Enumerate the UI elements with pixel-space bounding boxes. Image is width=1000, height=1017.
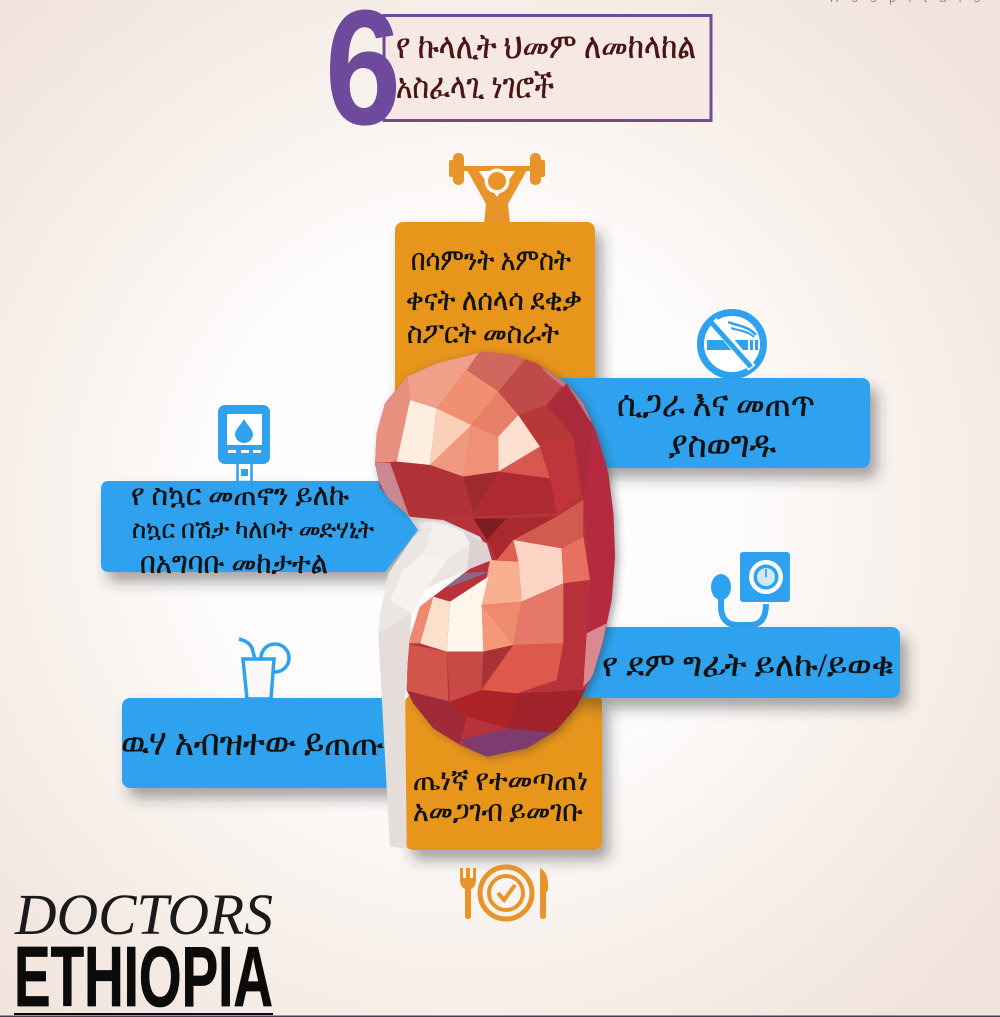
panel: no smoking or alcohol: ያስወግዱ [668, 425, 776, 466]
kidney body [370, 340, 630, 773]
kidney illustration [370, 340, 630, 848]
icon: weightlifter [449, 153, 545, 224]
logo: Doctors Ethiopia [14, 882, 273, 1017]
icon: no smoking [700, 312, 764, 376]
icon: plate and cutlery [460, 867, 548, 919]
panel: blood sugar: የ ስኳር መጠኖን ይለኩ [131, 479, 349, 512]
panel: blood sugar: በአግባቡ መከታተል [140, 547, 328, 580]
icon: blood pressure monitor [711, 552, 790, 625]
title: አስፈላጊ ነገሮች [396, 67, 554, 106]
panel: drink water [121, 698, 397, 788]
panel: blood sugar: ስኳር በሽታ ካለቦት መድሃኒት [132, 515, 374, 544]
panel: exercise: በሳምንት አምስት [411, 244, 571, 277]
panel: exercise: ቀናት ለሰላሳ ደቂቃ [406, 284, 582, 317]
logo: Doctors Ethiopia: DOCTORS [14, 882, 273, 947]
panel: healthy diet [405, 695, 602, 850]
title [325, 0, 711, 159]
panel: blood sugar [101, 479, 418, 580]
panel: exercise [395, 222, 595, 412]
panel: no smoking or alcohol [555, 378, 870, 468]
icon: glucose meter [218, 405, 270, 482]
panel: blood pressure: የ ደም ግፊት ይለኩ/ይወቁ [602, 648, 894, 684]
panel: healthy diet: ጤነኛ የተመጣጠነ [413, 764, 588, 797]
panel: blood pressure [575, 627, 900, 698]
panel: healthy diet: አመጋገብ ይመገቡ [413, 795, 583, 828]
title: የ ኩላሊት ህመም ለመከላከል [396, 27, 696, 66]
panel: drink water: ዉሃ አብዝተው ይጠጡ [121, 723, 384, 764]
icon: drink glass [239, 639, 289, 699]
ureter [378, 522, 492, 848]
panel: exercise: ስፖርት መስራት [407, 317, 559, 350]
panel: no smoking or alcohol: ሲጋራ እና መጠጥ [617, 384, 815, 425]
